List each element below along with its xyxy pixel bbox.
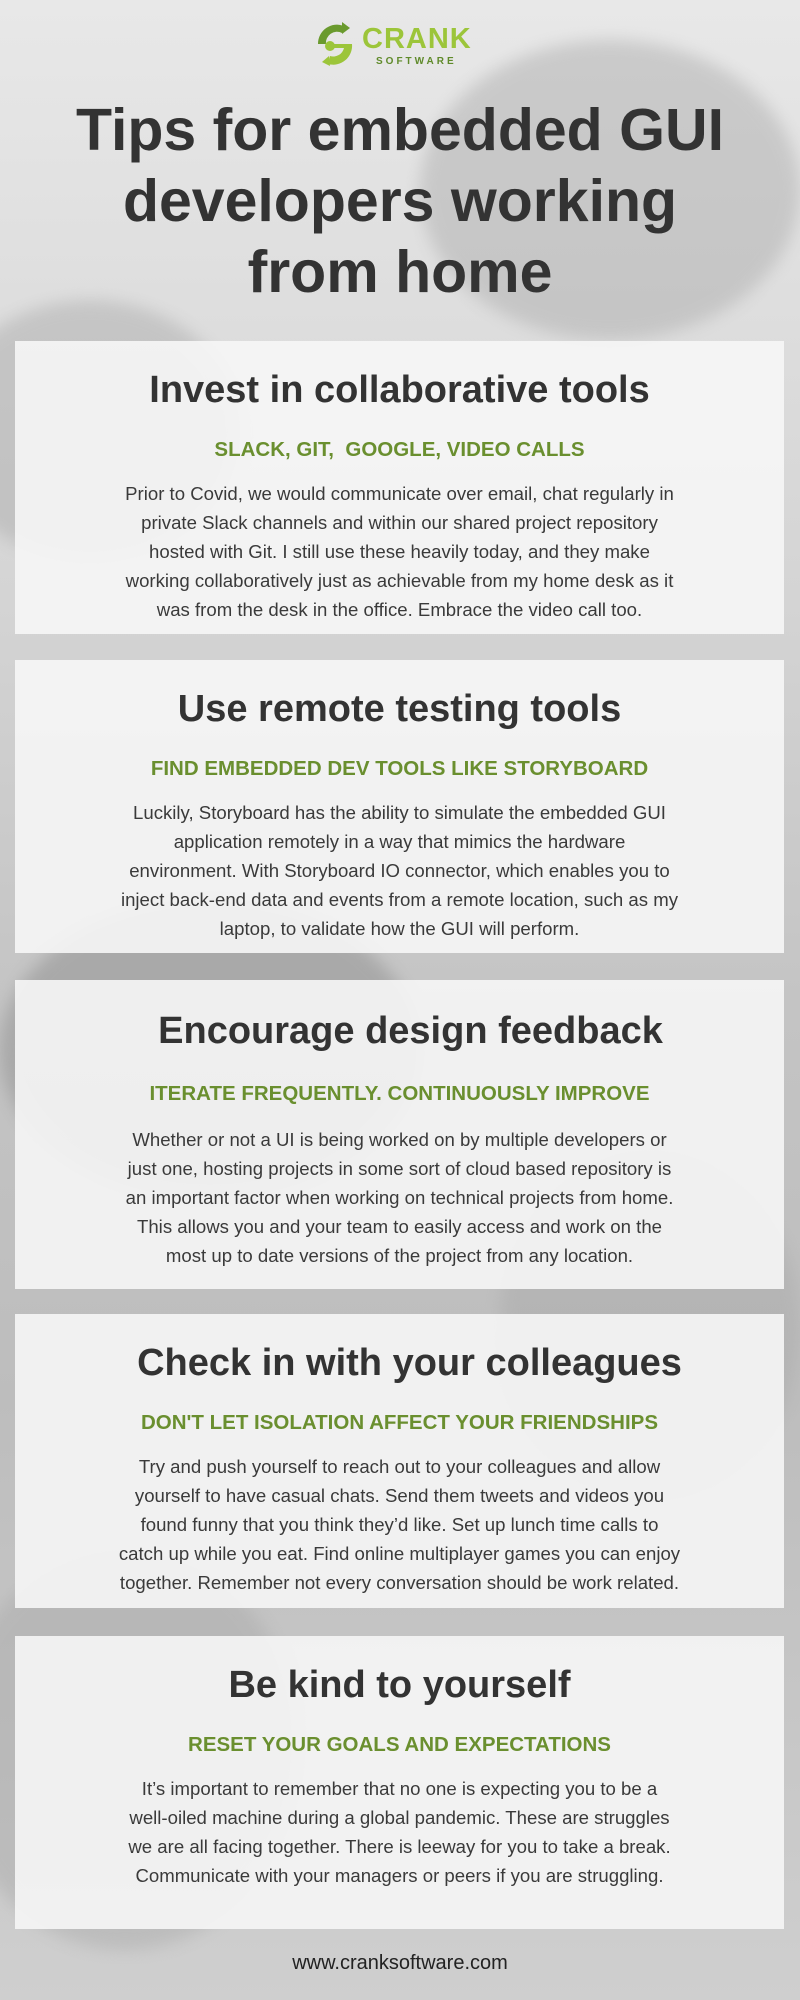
heading: Invest in collaborative tools bbox=[149, 369, 650, 411]
heading: Be kind to yourself bbox=[228, 1664, 571, 1706]
body text bbox=[128, 1778, 671, 1886]
panel: collaborative tools bbox=[15, 341, 784, 634]
body text: Luckily, Storyboard has the ability to simulate the embedded GUI bbox=[133, 802, 666, 823]
body text: application remotely in a way that mimics the hardware bbox=[174, 831, 625, 852]
title bbox=[76, 97, 724, 305]
body text: catch up while you eat. Find online multiplayer games you can enjoy bbox=[119, 1543, 680, 1564]
subheading: SLACK, GIT, GOOGLE, VIDEO CALLS bbox=[214, 438, 585, 461]
title: developers working bbox=[123, 168, 677, 234]
body text: Try and push yourself to reach out to your colleagues and allow bbox=[139, 1456, 660, 1477]
body text: well-oiled machine during a global pandemic. These are struggles bbox=[129, 1807, 670, 1828]
body text: together. Remember not every conversation should be work related. bbox=[120, 1572, 679, 1593]
logo bbox=[318, 22, 472, 67]
panel: design feedback bbox=[15, 980, 784, 1289]
body text: It’s important to remember that no one is expecting you to be a bbox=[142, 1778, 657, 1799]
text: CRANK SOFTWARE: CRANK bbox=[362, 23, 472, 55]
body text bbox=[125, 483, 674, 620]
body text: laptop, to validate how the GUI will perform. bbox=[220, 918, 579, 939]
body text: an important factor when working on technical projects from home. bbox=[126, 1187, 673, 1208]
body text: yourself to have casual chats. Send them tweets and videos you bbox=[135, 1485, 664, 1506]
body text: environment. With Storyboard IO connector, which enables you to bbox=[129, 860, 670, 881]
body text: Whether or not a UI is being worked on by multiple developers or bbox=[132, 1129, 667, 1150]
icon: crank logo bbox=[318, 22, 352, 66]
subheading: ITERATE FREQUENTLY. CONTINUOUSLY IMPROVE bbox=[149, 1082, 650, 1105]
title: from home bbox=[248, 239, 552, 305]
body text: was from the desk in the office. Embrace the video call too. bbox=[157, 599, 642, 620]
body text: most up to date versions of the project from any location. bbox=[166, 1245, 633, 1266]
body text bbox=[121, 802, 678, 939]
body text: working collaboratively just as achievable from my home desk as it bbox=[126, 570, 673, 591]
subheading: DON'T LET ISOLATION AFFECT YOUR FRIENDSHIPS bbox=[141, 1411, 658, 1434]
body text: inject back-end data and events from a remote location, such as my bbox=[121, 889, 678, 910]
body text: we are all facing together. There is leeway for you to take a break. bbox=[128, 1836, 671, 1857]
body text: just one, hosting projects in some sort of cloud based repository is bbox=[128, 1158, 671, 1179]
body text bbox=[119, 1456, 680, 1593]
title: Tips for embedded GUI bbox=[76, 97, 724, 163]
body text: private Slack channels and within our shared project repository bbox=[141, 512, 658, 533]
panel: be kind bbox=[15, 1636, 784, 1929]
heading: Check in with your colleagues bbox=[137, 1342, 682, 1384]
logo: SOFTWARE bbox=[376, 56, 457, 67]
subheading: RESET YOUR GOALS AND EXPECTATIONS bbox=[188, 1733, 611, 1756]
panel: remote testing bbox=[15, 660, 784, 953]
body text: Communicate with your managers or peers if you are struggling. bbox=[135, 1865, 664, 1886]
panel: colleagues bbox=[15, 1314, 784, 1608]
subheading: FIND EMBEDDED DEV TOOLS LIKE STORYBOARD bbox=[151, 757, 648, 780]
body text: found funny that you think they’d like. Set up lunch time calls to bbox=[141, 1514, 658, 1535]
heading: Use remote testing tools bbox=[178, 688, 621, 730]
footer url: www.cranksoftware.com bbox=[292, 1952, 508, 1974]
heading: Encourage design feedback bbox=[158, 1010, 663, 1052]
body text bbox=[126, 1129, 673, 1266]
body text: hosted with Git. I still use these heavily today, and they make bbox=[149, 541, 650, 562]
body text: This allows you and your team to easily access and work on the bbox=[137, 1216, 662, 1237]
body text: Prior to Covid, we would communicate over email, chat regularly in bbox=[125, 483, 674, 504]
